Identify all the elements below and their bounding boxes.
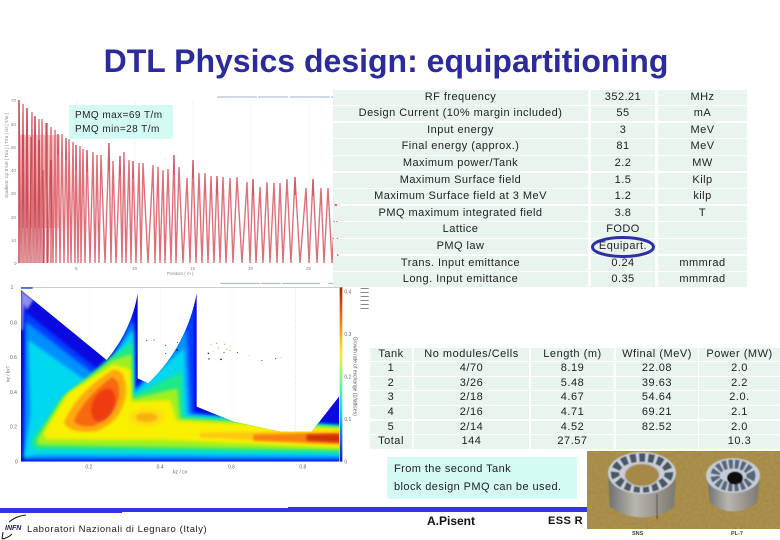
table: tanks: 5.48 [561,377,584,389]
chart: growth rate of exchange heatmap: 1 [11,285,14,291]
chart: PMQ gradient versus position: 15 [190,266,196,271]
chart: growth rate of exchange heatmap: 0.6 [228,465,235,471]
table: tanks: 2.0 [731,362,748,374]
table: tanks: 4 [388,406,394,418]
callout: block design PMQ note [387,457,577,499]
chart: growth rate of exchange heatmap: 0.4 [157,465,164,471]
chart: growth rate of exchange heatmap: kz / cx [173,470,188,476]
table: design parameters: RF frequency [425,90,496,102]
table: tanks: 2.0 [731,420,748,432]
table: design parameters: MW [692,157,713,169]
chart: growth rate of exchange heatmap: 0.6 [10,355,17,361]
table: tanks: 2.1 [731,406,748,418]
icon: INFN logo: INFN [5,525,22,532]
table: design parameters: MeV [690,140,714,152]
table: tanks: 10.3 [728,435,751,447]
highlight ellipse around Equipart. [591,236,655,258]
table: tanks: 22.08 [642,362,672,374]
table: design parameters: PMQ maximum integrated field [379,207,542,219]
chart: PMQ gradient versus position: 40 [11,168,17,173]
table: tanks: Wfinal (MeV) [622,348,692,360]
footer: author: A.Pisent [427,514,475,528]
chart: PMQ gradient versus position: 70 [11,98,17,103]
table: tanks: 5 [388,420,394,432]
table: tanks: 39.63 [642,377,672,389]
callout: block design PMQ note: block design PMQ can be used. [394,481,562,493]
table: design parameters: mmmrad [679,273,726,285]
callout: PMQ range [69,105,173,139]
footer rule [0,507,587,513]
table: design parameters: Kilp [692,174,713,186]
table: design parameters: 0.24 [611,256,635,268]
chart: PMQ gradient versus position: 50 [11,145,17,150]
table: design parameters: Trans. Input emittance [401,256,520,268]
chart: growth rate of exchange heatmap: 0.1 [344,417,352,423]
table: tanks: Tank [378,348,404,360]
table: design parameters: T [699,207,706,219]
table: tanks: Total [378,435,404,447]
table: tanks: 2/14 [460,420,483,432]
chart: PMQ gradient versus position [4,96,338,276]
title: DTL Physics design: equipartitioning [104,43,668,79]
table: tanks: 2 [388,377,394,389]
table: tanks: 3/26 [460,377,483,389]
table: design parameters: MHz [690,90,714,102]
table: design parameters: kilp [693,190,712,202]
chart: PMQ gradient versus position: Position ( m ) [167,271,194,276]
chart: growth rate of exchange heatmap: 0.2 [344,375,352,381]
table: design parameters: FODO [606,223,640,235]
table: tanks: 2.0. [729,391,750,403]
table: design parameters: Long. Input emittance [403,273,518,285]
table: tanks: 3 [388,391,394,403]
table: tanks: 82.52 [642,420,672,432]
table: tanks: 2/16 [460,406,483,418]
table: design parameters: 0.35 [611,273,635,285]
table: tanks: 27.57 [557,435,588,447]
table: tanks: 8.19 [561,362,584,374]
chart: growth rate of exchange heatmap: 0.3 [344,332,352,338]
chart: PMQ gradient versus position: 20 [248,266,254,271]
table: tanks: 69.21 [642,406,672,418]
chart: PMQ gradient versus position: 30 [11,191,17,196]
table: design parameters: Maximum Surface field at 3 MeV [374,190,547,202]
chart: growth rate of exchange heatmap: 0.8 [10,320,17,326]
callout: block design PMQ note: From the second Tank [394,463,511,475]
table: tanks: 4.67 [561,391,584,403]
chart: growth rate of exchange heatmap: Growth rate of exchange (1/lattices) [351,337,357,416]
chart: PMQ gradient versus position: 25 [306,266,312,271]
table: design parameters: PMQ law [437,240,484,252]
chart: growth rate of exchange heatmap: 0.2 [10,425,17,431]
chart: PMQ gradient versus position: 0 [14,261,17,266]
table: design parameters: 1.2 [615,190,631,202]
chart: PMQ gradient versus position: 20 [11,215,17,220]
chart: PMQ gradient versus position: 10 [132,266,138,271]
icon: INFN logo [2,514,26,540]
callout: PMQ range: PMQ max=69 T/m [75,110,163,121]
photo: PMQ magnets: PL-7 [731,531,743,537]
table: design parameters: Input energy [427,124,494,136]
table: design parameters: MeV [690,124,714,136]
table: design parameters: Maximum power/Tank [403,157,518,169]
footer: laboratory name: Laboratori Nazionali di Legnaro (Italy) [27,524,207,535]
chart: growth rate of exchange heatmap: 0 [15,459,18,465]
table: tanks: 4.71 [561,406,584,418]
table: design parameters: 2.2 [615,157,631,169]
table: design parameters: Design Current (10% margin included) [359,107,562,119]
table: tanks: 54.64 [642,391,672,403]
table: tanks: Length (m) [543,348,602,360]
table: design parameters: Lattice [443,223,478,235]
photo: PMQ magnets: SNS [632,531,644,537]
table: design parameters: 55 [616,107,630,119]
table: design parameters: 3 [620,124,626,136]
table: tanks [370,348,780,449]
table: tanks: 4/70 [460,362,483,374]
table: design parameters [333,90,747,287]
chart: growth rate of exchange heatmap: 0 [344,459,347,465]
table: tanks: Power (MW) [706,348,773,360]
chart: growth rate of exchange heatmap: 0.4 [10,390,17,396]
table: design parameters: mmmrad [679,256,726,268]
chart: growth rate of exchange heatmap [5,282,369,476]
table: design parameters: mA [694,107,711,119]
table: design parameters: Final energy (approx.) [402,140,519,152]
photo: PMQ magnets [587,451,780,537]
chart: growth rate of exchange heatmap: 0.2 [85,465,93,471]
callout: PMQ range: PMQ min=28 T/m [75,124,160,135]
chart: PMQ gradient versus position: Gradient, Cp 8 lu0 [ T/m ] ( T/m ) Gr [ T/m ] [4,113,9,198]
footer: event: ESS R [548,515,583,527]
table: tanks: 144 [462,435,481,447]
chart: growth rate of exchange heatmap: 0.4 [344,290,352,296]
table: design parameters: 81 [616,140,630,152]
chart: PMQ gradient versus position: 5 [75,266,78,271]
table: design parameters: 352.21 [605,90,641,102]
chart: growth rate of exchange heatmap: kz / kxT [5,365,10,382]
table: design parameters: Equipart. [599,240,647,252]
table: design parameters: Maximum Surface field [400,174,521,186]
table: tanks: No modules/Cells [424,348,519,360]
chart: PMQ gradient versus position: 10 [11,238,17,243]
table: design parameters: 1.5 [615,174,631,186]
table: design parameters: 3.8 [615,207,631,219]
chart: growth rate of exchange heatmap: 0.8 [299,465,307,471]
table: tanks: 2/18 [460,391,483,403]
table: tanks: 2.2 [731,377,748,389]
table: tanks: 1 [388,362,394,374]
chart: PMQ gradient versus position: 60 [11,122,17,127]
table: tanks: 4.52 [561,420,584,432]
